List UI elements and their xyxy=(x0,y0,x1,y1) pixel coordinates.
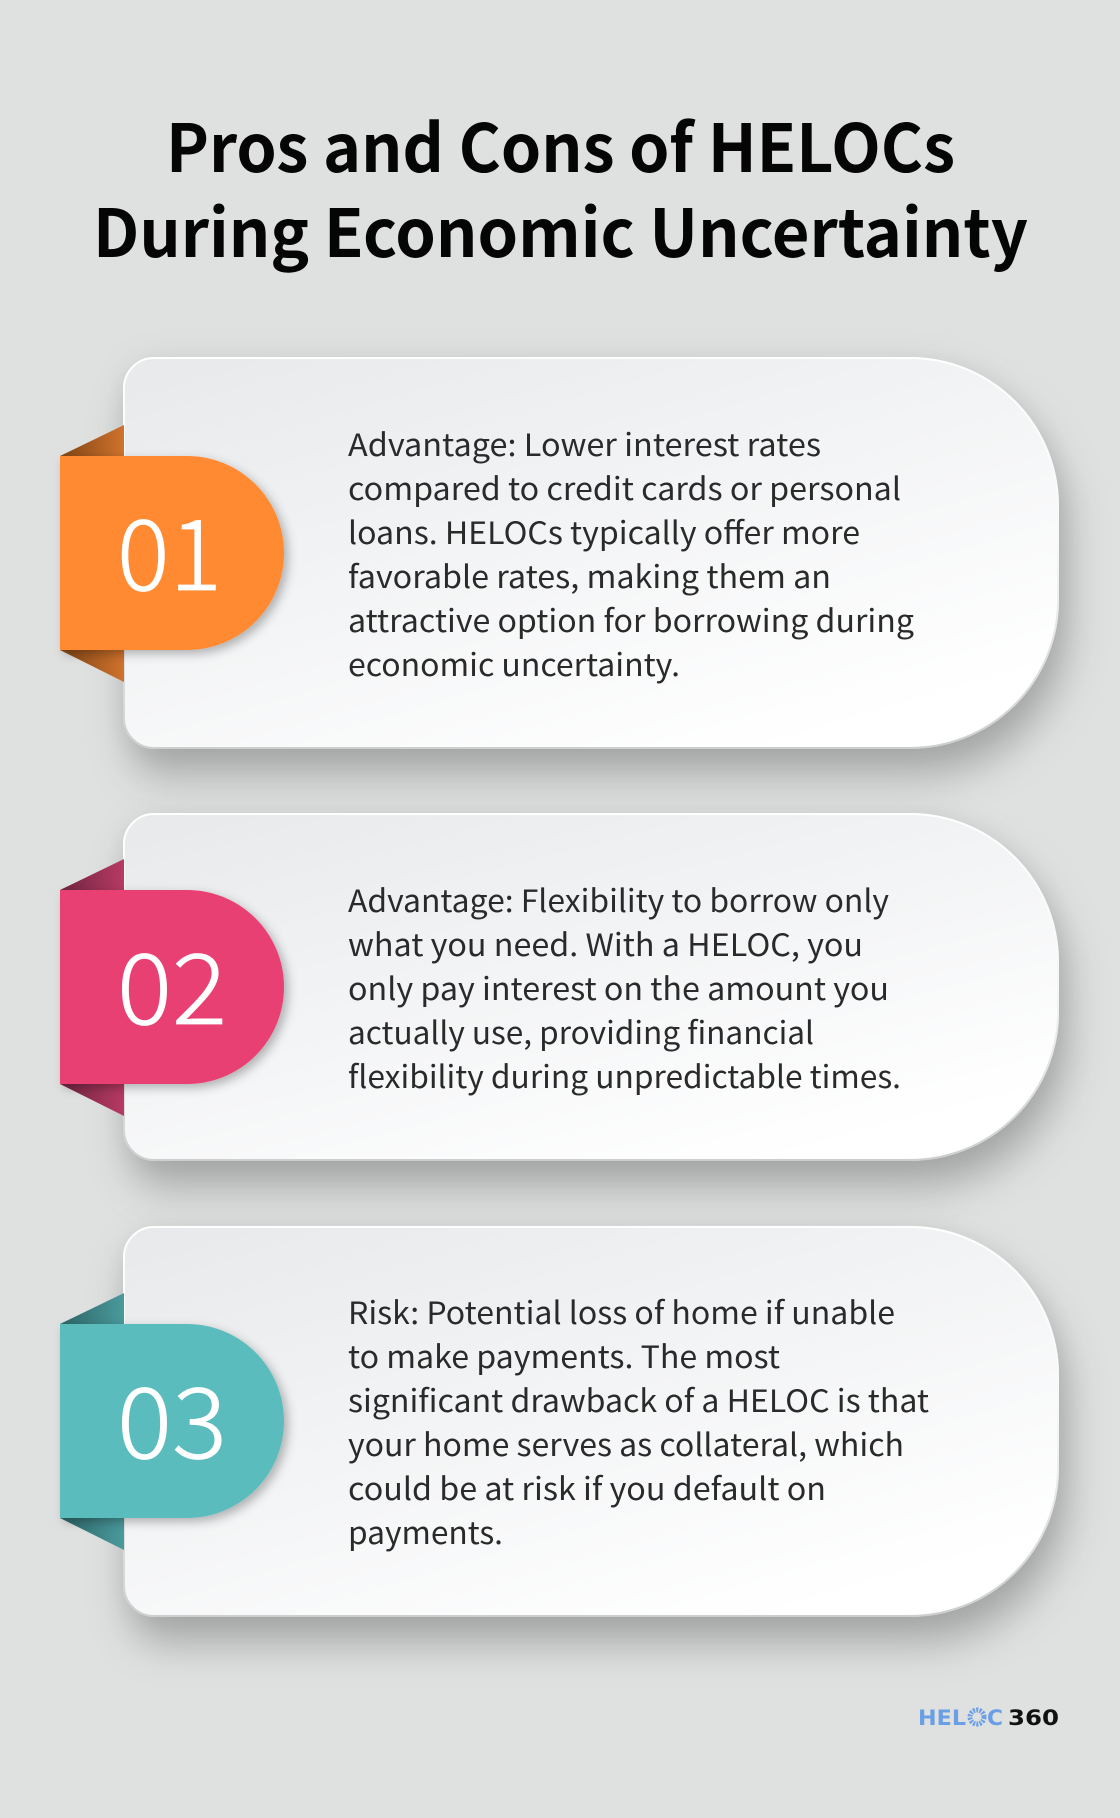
badge 02: 02 xyxy=(117,911,227,1053)
ribbon fold: orange xyxy=(60,425,124,682)
badge 02 xyxy=(60,890,284,1084)
card 02 xyxy=(124,814,1058,1160)
logo: HELOC360: 360 xyxy=(1008,1706,1059,1730)
badge 03: 03 xyxy=(117,1345,227,1487)
text 03: your home serves as collateral, which xyxy=(348,1420,904,1465)
text 02: Advantage: Flexibility to borrow only xyxy=(348,876,889,921)
panel: item 01 xyxy=(60,358,1058,748)
badge 01: 01 xyxy=(117,477,222,619)
panel: item 02 xyxy=(60,814,1058,1160)
text 01: Advantage: Lower interest rates xyxy=(348,420,821,465)
logo: HELOC360 xyxy=(918,1706,1059,1730)
ribbon fold: teal xyxy=(60,1293,124,1550)
card 01 xyxy=(124,358,1058,748)
logo: HELOC360: C xyxy=(987,1706,1003,1730)
text 01: attractive option for borrowing during xyxy=(348,596,915,641)
text 02: only pay interest on the amount you xyxy=(348,964,889,1009)
title: During Economic Uncertainty xyxy=(93,181,1028,277)
badge 03 xyxy=(60,1324,284,1518)
text 01: loans. HELOCs typically offer more xyxy=(348,508,860,553)
text 03 xyxy=(348,1288,929,1553)
text 03: could be at risk if you default on xyxy=(348,1464,826,1509)
text 01: favorable rates, making them an xyxy=(348,552,831,597)
text 02: actually use, providing financial xyxy=(348,1008,814,1053)
panel: item 03 xyxy=(60,1227,1058,1616)
text 02 xyxy=(348,876,901,1097)
text 01: compared to credit cards or personal xyxy=(348,464,901,509)
title xyxy=(93,96,1028,277)
ribbon fold: pink xyxy=(60,859,124,1116)
text 01: economic uncertainty. xyxy=(348,640,680,685)
badge 01 xyxy=(60,456,284,650)
text 03: to make payments. The most xyxy=(348,1332,780,1377)
text 03: payments. xyxy=(348,1508,503,1553)
title: Pros and Cons of HELOCs xyxy=(166,96,955,192)
text 02: what you need. With a HELOC, you xyxy=(348,920,863,965)
text 01 xyxy=(348,420,915,685)
text 03: Risk: Potential loss of home if unable xyxy=(348,1288,895,1333)
text 02: flexibility during unpredictable times. xyxy=(348,1052,901,1097)
logo: HELOC360: HEL xyxy=(918,1706,966,1730)
card 03 xyxy=(124,1227,1058,1616)
text 03: significant drawback of a HELOC is that xyxy=(348,1376,929,1421)
